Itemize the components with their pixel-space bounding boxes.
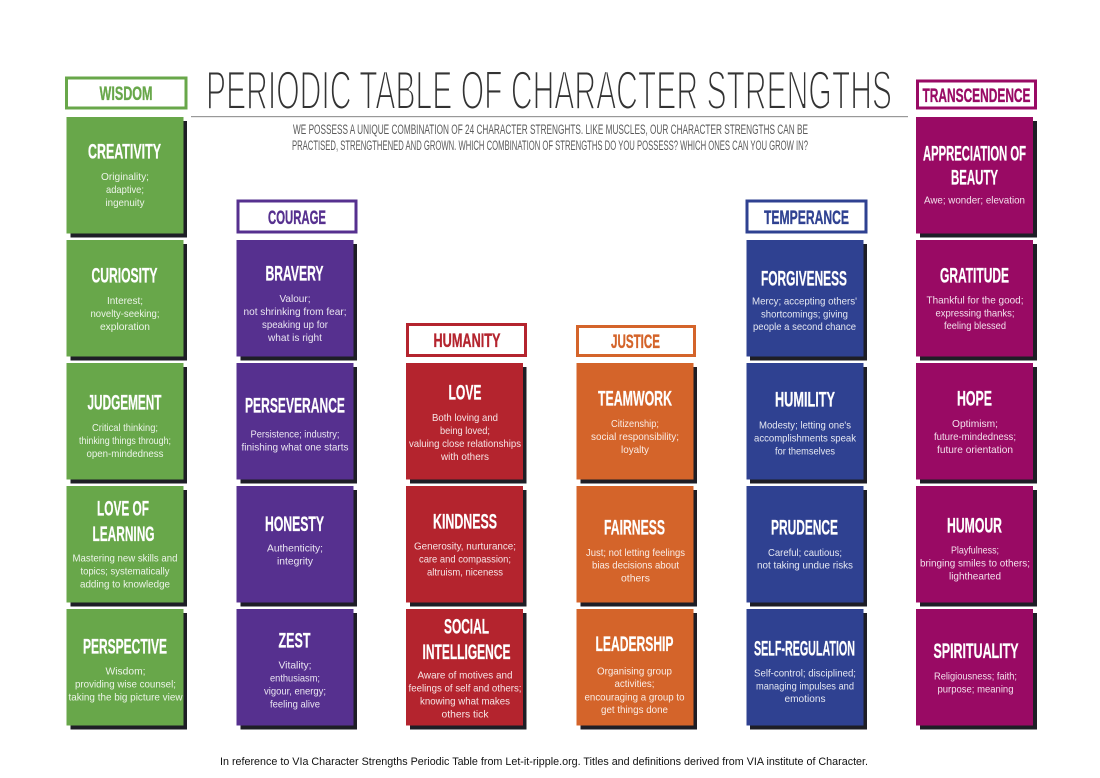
card: prudence: PRUDENCE: [771, 516, 838, 540]
panel: courage column: [236, 201, 357, 730]
card: honesty: [236, 486, 357, 606]
card: humility: for themselves: [775, 446, 835, 458]
card: humility: accomplishments speak: [754, 432, 857, 444]
card: teamwork: social responsibility;: [591, 431, 679, 443]
card: spirituality: purpose; meaning: [938, 684, 1014, 696]
card: love: Both loving and: [432, 412, 498, 424]
card: hope: future orientation: [937, 444, 1013, 456]
card: bravery: Valour;: [280, 293, 310, 305]
card: social intelligence: SOCIAL: [444, 616, 489, 638]
card: zest: Vitality;: [278, 660, 312, 672]
card: perseverance: finishing what one starts: [242, 442, 348, 454]
card: humility: HUMILITY: [775, 388, 835, 412]
card: spirituality: Religiousness; faith;: [934, 670, 1017, 682]
card: self-regulation: emotions: [784, 693, 826, 705]
card: gratitude: expressing thanks;: [936, 308, 1014, 320]
category label: humanity: [408, 324, 526, 356]
card: appreciation of beauty: [916, 117, 1037, 238]
card: appreciation of beauty: Awe; wonder; elevation: [924, 194, 1025, 206]
card: fairness: FAIRNESS: [604, 516, 665, 540]
card: social intelligence: others tick: [442, 708, 489, 720]
card: zest: enthusiasm;: [270, 672, 320, 684]
card: prudence: Careful; cautious;: [768, 547, 842, 559]
card: kindness: KINDNESS: [433, 510, 497, 534]
card: self-regulation: [746, 609, 867, 730]
card: curiosity: [66, 240, 187, 360]
category label: courage: [238, 201, 356, 232]
card: leadership: get things done: [601, 704, 668, 716]
category label: transcendence: TRANSCENDENCE: [922, 86, 1030, 107]
panel: humanity column: [406, 324, 526, 730]
card: teamwork: loyalty: [621, 444, 650, 456]
card: gratitude: GRATITUDE: [940, 264, 1009, 288]
category label: temperance: [747, 201, 866, 232]
card: forgiveness: shortcomings; giving: [761, 308, 848, 320]
card: judgement: JUDGEMENT: [88, 392, 162, 414]
card: hope: [916, 363, 1037, 484]
card: perspective: taking the big picture view: [68, 692, 183, 704]
category label: wisdom: WISDOM: [100, 84, 152, 105]
card: forgiveness: Mercy; accepting others': [752, 296, 857, 308]
card: forgiveness: people a second chance: [753, 321, 856, 333]
category label: wisdom: [66, 78, 186, 108]
card: spirituality: SPIRITUALITY: [934, 640, 1018, 663]
card: fairness: bias decisions about: [592, 560, 679, 572]
panel: transcendence column: [916, 81, 1037, 730]
card: zest: [236, 609, 357, 730]
card: humility: [746, 363, 867, 484]
category label: courage: COURAGE: [268, 208, 326, 229]
card: perspective: PERSPECTIVE: [83, 636, 167, 658]
card: social intelligence: feelings of self and others;: [408, 682, 522, 694]
card: judgement: thinking things through;: [79, 435, 171, 447]
card: spirituality: [916, 609, 1037, 730]
card: love: being loved;: [440, 425, 490, 437]
category label: transcendence: [918, 81, 1036, 108]
card: creativity: CREATIVITY: [88, 140, 161, 164]
card: self-regulation: SELF-REGULATION: [754, 638, 855, 660]
panel: temperance column: [746, 201, 867, 730]
card: social intelligence: [406, 609, 526, 730]
card: judgement: open-mindedness: [86, 448, 164, 460]
card: hope: Optimism;: [952, 418, 998, 430]
card: honesty: integrity: [277, 556, 314, 568]
card: kindness: care and compassion;: [419, 554, 511, 566]
card: leadership: activities;: [614, 678, 654, 690]
card: leadership: encouraging a group to: [584, 692, 685, 704]
card: social intelligence: INTELLIGENCE: [422, 641, 510, 664]
category label: humanity: HUMANITY: [434, 331, 501, 352]
card: creativity: ingenuity: [106, 197, 145, 209]
card: self-regulation: Self-control; disciplined;: [754, 668, 856, 680]
card: love of learning: [66, 486, 187, 606]
card: social intelligence: knowing what makes: [420, 696, 510, 708]
card: forgiveness: [746, 240, 867, 360]
card: prudence: [746, 486, 867, 606]
category label: justice: [578, 326, 694, 356]
card: love of learning: adding to knowledge: [80, 578, 170, 590]
card: honesty: Authenticity;: [267, 542, 323, 554]
card: leadership: [576, 609, 697, 730]
card: curiosity: Interest;: [107, 295, 143, 307]
card: prudence: not taking undue risks: [757, 560, 853, 572]
card: leadership: Organising group: [597, 666, 672, 678]
card: humour: bringing smiles to others;: [920, 558, 1030, 570]
card: fairness: Just; not letting feelings: [586, 547, 685, 559]
card: perspective: [66, 609, 187, 730]
card: curiosity: exploration: [100, 321, 150, 333]
card: humour: HUMOUR: [947, 514, 1002, 538]
card: social intelligence: Aware of motives and: [418, 670, 513, 682]
card: teamwork: Citizenship;: [611, 418, 659, 430]
card: bravery: speaking up for: [262, 319, 328, 331]
card: judgement: Critical thinking;: [92, 422, 158, 434]
card: curiosity: CURIOSITY: [92, 264, 158, 288]
card: love of learning: LEARNING: [92, 523, 154, 546]
card: zest: vigour, energy;: [264, 686, 326, 698]
card: perseverance: [236, 363, 357, 484]
card: gratitude: feeling blessed: [944, 320, 1006, 332]
card: gratitude: Thankful for the good;: [926, 294, 1024, 306]
card: kindness: [406, 486, 526, 606]
card: judgement: [66, 363, 187, 484]
card: bravery: what is right: [267, 332, 322, 344]
card: honesty: HONESTY: [265, 513, 324, 536]
card: love: [406, 363, 526, 484]
card: self-regulation: managing impulses and: [756, 680, 854, 692]
card: teamwork: [576, 363, 697, 484]
card: curiosity: novelty-seeking;: [90, 308, 160, 320]
card: zest: ZEST: [278, 630, 311, 652]
category label: justice: JUSTICE: [611, 332, 660, 353]
card: leadership: LEADERSHIP: [596, 633, 674, 656]
footer citation: In reference to VIa Character Strengths Periodic Table from Let-it-ripple.org. Titles and definitions derived from VIA institute of Character.: [220, 756, 868, 768]
card: love: LOVE: [448, 382, 482, 404]
panel: wisdom column: [66, 78, 187, 730]
card: humour: lighthearted: [949, 570, 1001, 582]
card: gratitude: [916, 240, 1037, 360]
card: perseverance: Persistence; industry;: [250, 428, 340, 440]
panel: justice column: [576, 326, 697, 730]
card: creativity: Originality;: [101, 171, 149, 183]
card: fairness: others: [621, 572, 650, 584]
card: love: valuing close relationships: [409, 438, 521, 450]
card: teamwork: TEAMWORK: [598, 388, 672, 410]
card: creativity: adaptive;: [106, 184, 144, 196]
card: bravery: BRAVERY: [266, 262, 324, 286]
card: creativity: [66, 117, 187, 238]
card: bravery: not shrinking from fear;: [244, 306, 346, 318]
card: hope: future-mindedness;: [934, 431, 1016, 443]
card: kindness: Generosity, nurturance;: [414, 540, 516, 552]
card: forgiveness: FORGIVENESS: [761, 268, 847, 290]
card: humour: Playfulness;: [951, 544, 999, 556]
intro text: [292, 122, 808, 153]
card: fairness: [576, 486, 697, 606]
card: love of learning: LOVE OF: [97, 498, 149, 520]
card: kindness: altruism, niceness: [427, 566, 503, 578]
card: perspective: providing wise counsel;: [75, 678, 176, 690]
card: bravery: [236, 240, 357, 360]
card: love of learning: Mastering new skills and: [72, 552, 178, 564]
card: zest: feeling alive: [270, 698, 320, 710]
category label: temperance: TEMPERANCE: [764, 208, 849, 229]
card: hope: HOPE: [957, 388, 992, 410]
card: appreciation of beauty: BEAUTY: [951, 166, 998, 190]
card: love: with others: [440, 451, 489, 463]
card: perspective: Wisdom;: [106, 666, 146, 678]
card: perseverance: PERSEVERANCE: [245, 394, 345, 418]
card: humour: [916, 486, 1037, 606]
card: love of learning: topics; systematically: [80, 566, 170, 578]
card: humility: Modesty; letting one's: [759, 420, 851, 432]
